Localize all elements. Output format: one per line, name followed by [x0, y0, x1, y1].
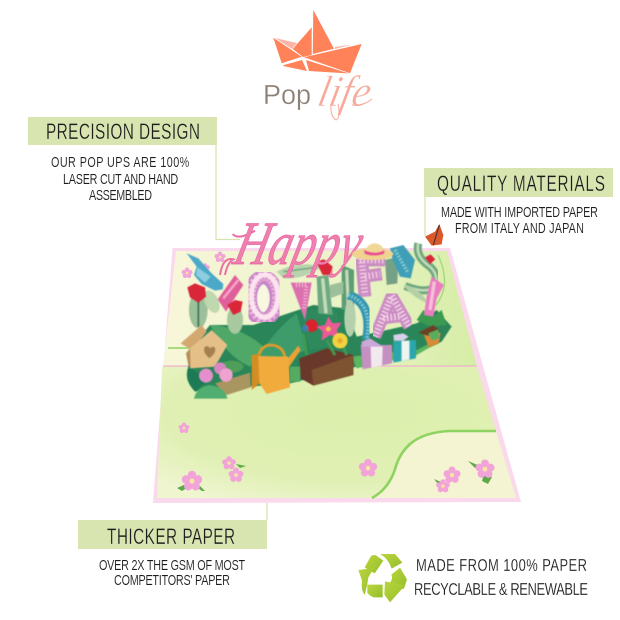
- text: Happy script: Happy: [227, 209, 371, 278]
- orange pot: [418, 325, 441, 347]
- heading: precision design: PRECISION DESIGN: [46, 120, 200, 145]
- text: precision description: LASER CUT AND HAND: [63, 170, 178, 187]
- letter H: [317, 265, 354, 315]
- text: precision description: ASSEMBLED: [89, 186, 152, 203]
- panel: thicker paper: [78, 503, 267, 588]
- birdhouse: [181, 325, 227, 368]
- logo wordmark: life: [314, 66, 376, 116]
- text: precision description: [51, 153, 190, 203]
- text: thicker description: COMPETITORS' PAPER: [114, 571, 230, 588]
- letter M leaves: [189, 275, 243, 334]
- icon: origami boat: [273, 10, 362, 74]
- letter T: [277, 264, 322, 320]
- text: quality description: FROM ITALY AND JAPAN: [455, 219, 584, 236]
- letter S: [403, 243, 436, 303]
- heading: quality materials: QUALITY MATERIALS: [437, 172, 605, 197]
- heading: thicker paper: THICKER PAPER: [107, 525, 235, 550]
- tulips: [187, 254, 435, 315]
- basket and blossoms: [194, 361, 251, 399]
- text: thicker description: [99, 556, 245, 588]
- butterfly: [425, 224, 443, 246]
- text: quality description: MADE WITH IMPORTED PAPER: [441, 203, 598, 220]
- icon: recycle symbol: [358, 554, 407, 602]
- letter E: [358, 257, 398, 297]
- pop-up artwork: Happy Mother's Day garden: [181, 209, 452, 399]
- foliage: [187, 305, 452, 392]
- letter O: [250, 275, 278, 319]
- text: precision description: OUR POP UPS ARE 100%: [51, 153, 190, 170]
- logo: Poplife: [263, 10, 376, 120]
- letter R blue: [390, 245, 415, 278]
- logo wordmark: Pop: [263, 79, 311, 110]
- text: recycling statement: RECYCLABLE & RENEWABLE: [414, 580, 588, 600]
- letter D: [344, 295, 368, 340]
- cream corner: [372, 431, 516, 498]
- green path curve: [372, 431, 496, 498]
- text: thicker description: OVER 2X THE GSM OF MOST: [99, 556, 245, 573]
- letter A: [375, 296, 409, 337]
- panel: quality materials: [424, 168, 613, 236]
- watering can: [252, 345, 301, 394]
- brown planter with flowers: [290, 317, 353, 386]
- letter Y: [424, 277, 444, 317]
- text: recycling statement: MADE FROM 100% PAPER: [416, 556, 587, 576]
- panel: precision design: [28, 117, 240, 240]
- card flowers: [177, 252, 495, 492]
- pop-up card base: [153, 248, 521, 503]
- logo wordmark: [263, 66, 376, 120]
- bird: [187, 253, 223, 291]
- sun hat: [352, 243, 393, 260]
- text: recycling statement: [414, 556, 588, 600]
- gift boxes: [361, 333, 416, 369]
- text: quality description: [441, 203, 598, 236]
